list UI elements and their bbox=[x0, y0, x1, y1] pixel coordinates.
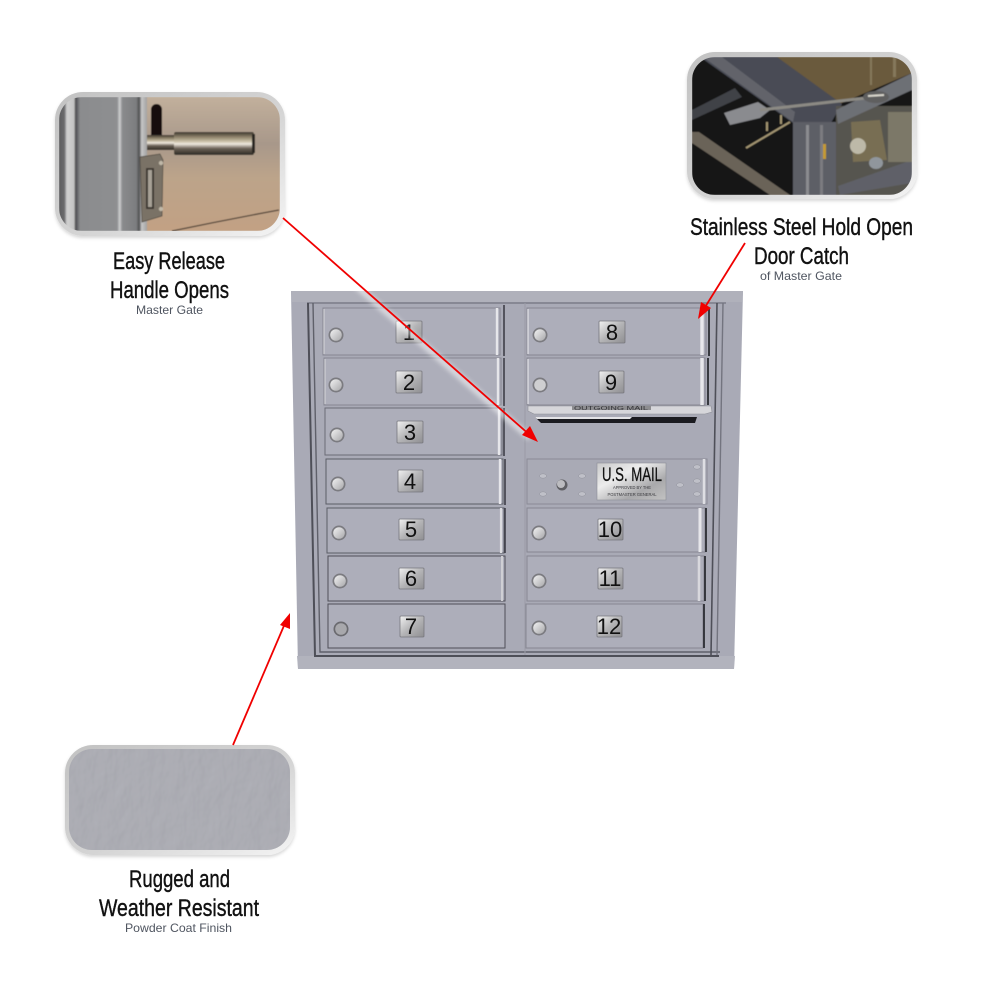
outgoing mail slot: OUTGOING MAIL bbox=[574, 406, 648, 412]
door 12 bbox=[526, 604, 704, 648]
photo callout: easy release handle bbox=[55, 92, 285, 236]
door 9 bbox=[527, 358, 708, 405]
master gate panel with U.S. Mail plate bbox=[527, 459, 707, 504]
door 12: 12 bbox=[597, 614, 621, 639]
caption: of master gate: of Master Gate bbox=[760, 269, 842, 283]
master gate panel with U.S. Mail plate: APPROVED BY THE bbox=[613, 485, 651, 490]
heading: easy release: Handle Opens bbox=[110, 277, 229, 304]
photo callout: door catch bbox=[687, 52, 917, 199]
heading: rugged and weather resistant: Rugged and bbox=[129, 866, 230, 893]
door 7: 7 bbox=[405, 614, 417, 639]
arrow: door catch callout to door 8 bbox=[698, 243, 745, 319]
outgoing mail slot bbox=[528, 406, 712, 423]
cabinet frame bbox=[291, 291, 743, 669]
mailbox unit bbox=[291, 291, 743, 669]
door 8: 8 bbox=[606, 320, 618, 345]
door 6: 6 bbox=[405, 566, 417, 591]
door 10 bbox=[527, 508, 706, 552]
door 7 bbox=[328, 604, 505, 648]
door 9: 9 bbox=[605, 370, 617, 395]
heading: easy release: Easy Release bbox=[113, 248, 225, 275]
door 5 bbox=[327, 508, 505, 553]
master gate panel with U.S. Mail plate: U.S. MAIL bbox=[602, 465, 662, 486]
door 2 bbox=[324, 358, 504, 406]
door 11: 11 bbox=[599, 566, 621, 591]
door 6 bbox=[328, 556, 505, 601]
door 1 bbox=[323, 305, 504, 356]
door 3: 3 bbox=[404, 420, 416, 445]
door 4: 4 bbox=[404, 469, 416, 494]
heading: rugged and weather resistant: Weather Resistant bbox=[99, 895, 259, 922]
arrow: handle callout to master gate bbox=[283, 218, 538, 442]
heading: stainless steel door catch: Door Catch bbox=[754, 243, 849, 270]
heading: stainless steel door catch: Stainless Steel Hold Open bbox=[690, 214, 913, 241]
caption: master gate: Master Gate bbox=[136, 303, 203, 317]
heading: easy release bbox=[110, 248, 229, 304]
door 11 bbox=[527, 556, 705, 601]
door 5: 5 bbox=[405, 517, 417, 542]
caption: powder coat finish: Powder Coat Finish bbox=[125, 921, 232, 935]
photo callout: powder coat texture bbox=[65, 745, 295, 855]
door 8 bbox=[527, 308, 709, 356]
heading: stainless steel door catch bbox=[690, 214, 913, 270]
door 10: 10 bbox=[598, 517, 622, 542]
door 4 bbox=[326, 459, 505, 505]
heading: rugged and weather resistant bbox=[99, 866, 259, 922]
door 3 bbox=[325, 408, 504, 456]
door 1: 1 bbox=[403, 320, 415, 345]
master gate panel with U.S. Mail plate: POSTMASTER GENERAL bbox=[608, 492, 657, 497]
door 2: 2 bbox=[403, 370, 415, 395]
arrow: powder coat callout to cabinet bbox=[233, 613, 290, 745]
